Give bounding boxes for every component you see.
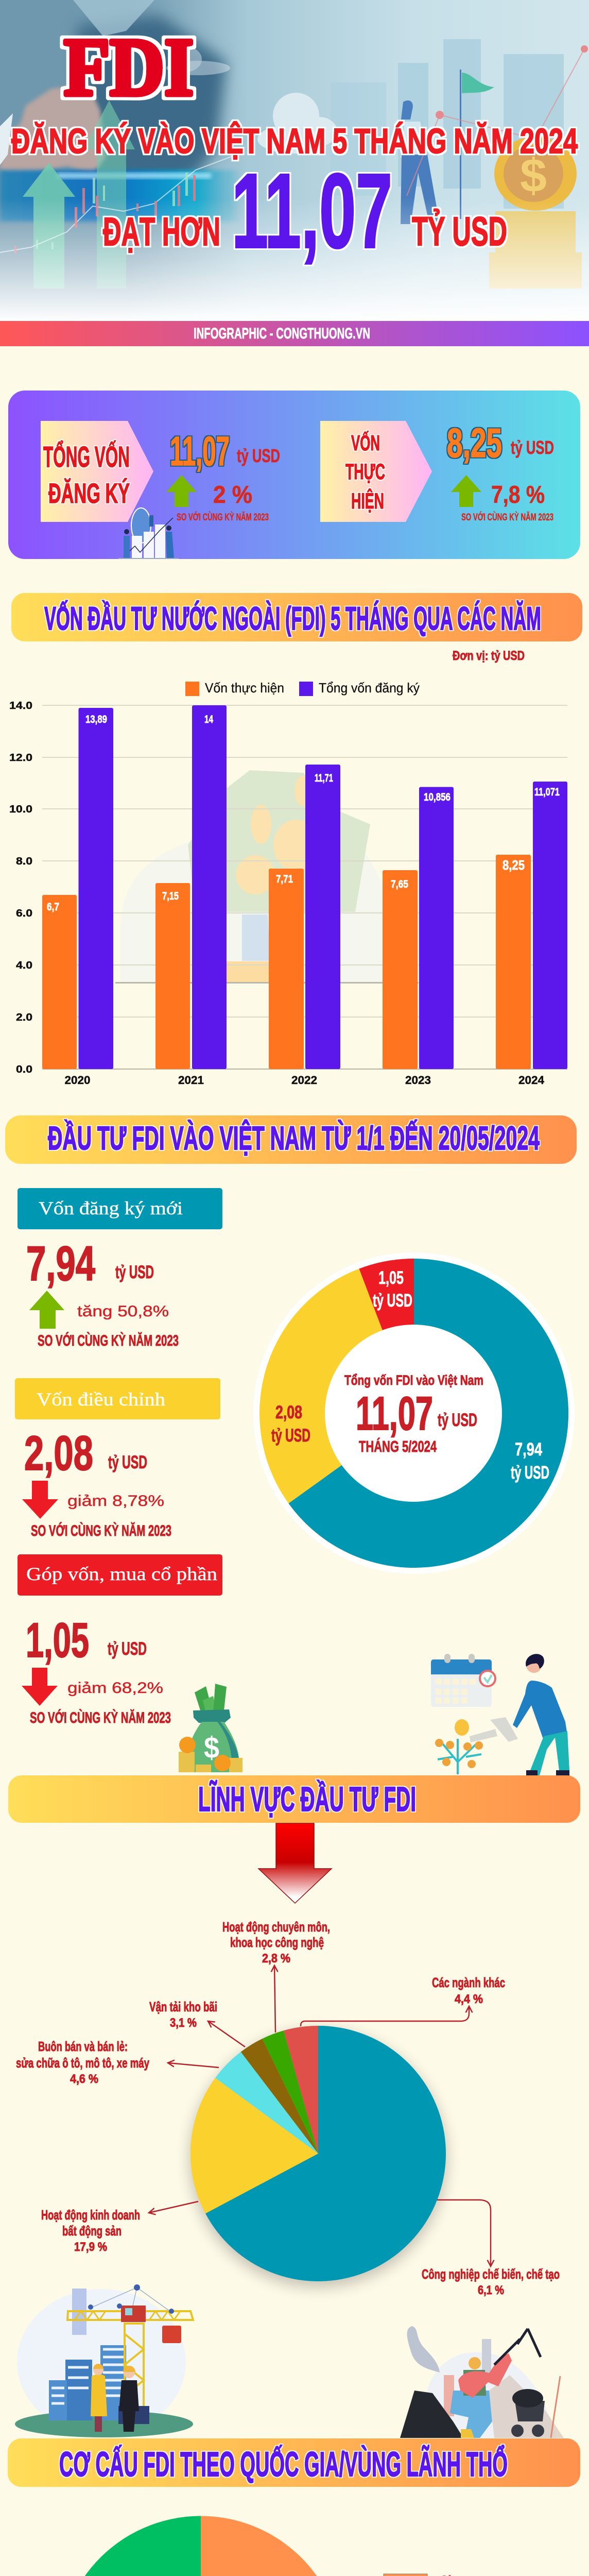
donut labels: tỷ USD [511, 1463, 549, 1483]
headline figure [103, 152, 507, 270]
block: new registered capital: Vốn đăng ký mới [39, 1198, 183, 1218]
person with flag [401, 100, 413, 120]
pie chart: countries [59, 2516, 343, 2576]
block: adjusted capital: tỷ USD [108, 1452, 147, 1472]
donut labels: tỷ USD [271, 1426, 310, 1446]
segment: other [284, 2026, 318, 2154]
segment: new capital [288, 1259, 568, 1568]
tag: total registered capital: ĐĂNG KÝ [48, 478, 130, 509]
bars: 2024: 2024 [518, 1074, 545, 1087]
icon: money bag [179, 1684, 242, 1772]
block: adjusted capital: 2,08 [24, 1426, 93, 1481]
block: new registered capital: tỷ USD [115, 1262, 154, 1282]
y axis labels: 10.0 [9, 804, 32, 815]
banner: investment sectors [8, 1775, 580, 1823]
segment: adjusted capital [259, 1269, 414, 1503]
block: capital contribution: tỷ USD [108, 1639, 147, 1659]
segment: real estate [190, 2078, 318, 2213]
bars: 2021 [155, 705, 227, 1087]
block: adjusted capital: Vốn điều chỉnh [37, 1389, 165, 1410]
donut labels: 2,08 [275, 1402, 302, 1422]
unit note: Đơn vị: tỷ USD [453, 649, 525, 663]
tag: implemented capital: VỐN [351, 430, 380, 455]
callouts: sector labels [16, 1919, 560, 2297]
plant [438, 1739, 481, 1774]
banner: investment sectors: LĨNH VỰC ĐẦU TƯ FDI [198, 1780, 416, 1819]
bars: 2021: 14 [204, 714, 213, 725]
hand [0, 85, 106, 180]
FDI heading: FDI [64, 21, 194, 113]
hero: illustrated header [0, 0, 589, 346]
segment: Singapore [201, 2516, 343, 2576]
block: new registered capital: SO VỚI CÙNG KỲ NĂM 2023 [38, 1332, 179, 1349]
block: capital contribution [18, 1554, 222, 1726]
block: capital contribution: SO VỚI CÙNG KỲ NĂM 2023 [30, 1709, 171, 1726]
chart background money illustration [115, 770, 419, 984]
segment: professional activities [262, 2030, 318, 2154]
label: other sectors: 4,4 % [455, 1992, 483, 2006]
label: other sectors: Các ngành khác [432, 1975, 505, 1990]
label: professional activities: 2,8 % [262, 1952, 290, 1965]
donut centre text: tỷ USD [438, 1410, 477, 1430]
label: real estate: bất động sản [62, 2223, 122, 2239]
label: professional activities [222, 1919, 330, 1965]
arrow: down to pie [258, 1823, 332, 1903]
label: transport: 3,1 % [170, 2016, 197, 2030]
bars: 2022 [269, 765, 340, 1087]
label: real estate: Hoạt động kinh doanh [41, 2207, 140, 2223]
bars: 2022: 7,71 [276, 873, 293, 885]
headline figure: TỶ USD [412, 208, 507, 254]
candle chart [0, 155, 237, 252]
donut centre text: Tổng vốn FDI vào Việt Nam [344, 1372, 483, 1388]
bars: 2020: 6,7 [47, 901, 59, 913]
donut centre text [344, 1372, 483, 1455]
donut labels [271, 1268, 549, 1483]
block: adjusted capital [15, 1378, 220, 1539]
figure: 11,07 [166, 428, 280, 523]
legend [185, 680, 420, 696]
gold coin and stack [489, 137, 582, 289]
label: manufacturing [422, 2266, 560, 2297]
donut centre text: THÁNG 5/2024 [359, 1437, 437, 1455]
label: transport [149, 1999, 217, 2030]
icon: miner scene [400, 2326, 564, 2438]
segment: contribution [359, 1259, 414, 1413]
green arrows [23, 163, 75, 289]
icon: money bag: $ [204, 1731, 219, 1765]
donut labels: 7,94 [515, 1439, 542, 1460]
y axis labels [9, 700, 32, 1075]
icon: construction scene [15, 2284, 193, 2437]
tag: implemented capital [320, 421, 432, 522]
tag: total registered capital [41, 421, 153, 522]
grid lines [42, 705, 567, 1017]
hero background image [0, 0, 589, 322]
label: other sectors [432, 1975, 505, 2006]
bars: 2020: 2020 [65, 1074, 91, 1087]
figure: 8,25 [447, 420, 554, 523]
label: manufacturing: 6,1 % [478, 2283, 504, 2297]
donut chart [253, 1252, 575, 1574]
label: wholesale and retail: 4,6 % [70, 2072, 98, 2086]
bars: 2023 [383, 787, 454, 1087]
y axis labels: 2.0 [16, 1012, 32, 1023]
tag: total registered capital: TỔNG VỐN [43, 440, 130, 473]
label: professional activities: khoa học công nghệ [230, 1935, 324, 1950]
y axis labels: 0.0 [16, 1064, 32, 1075]
figure: 11,07: tỷ USD [237, 445, 280, 466]
legend: countries [384, 2573, 576, 2576]
legend: Vốn thực hiện [205, 680, 284, 696]
figure: 11,07: 2 % [213, 481, 252, 508]
label: real estate [41, 2207, 140, 2254]
y axis labels: 12.0 [9, 752, 32, 764]
y axis labels: 6.0 [16, 908, 32, 919]
block: capital contribution: giảm 68,2% [67, 1680, 163, 1697]
block: new registered capital [18, 1188, 222, 1349]
y axis labels: 8.0 [16, 856, 32, 867]
segment: wholesale and retail [215, 2052, 318, 2154]
headline figure: 11,07 [232, 152, 392, 270]
label: wholesale and retail [16, 2039, 149, 2086]
top bar [0, 321, 589, 346]
segment: transport [241, 2039, 318, 2154]
glow band [0, 170, 242, 222]
bars: 2024 [496, 782, 567, 1087]
block: new registered capital: tăng 50,8% [77, 1303, 169, 1320]
y axis labels: 4.0 [16, 960, 32, 971]
figure: 8,25: 7,8 % [491, 481, 545, 508]
block: new registered capital: 7,94 [26, 1236, 95, 1291]
segment: manufacturing [205, 2026, 446, 2281]
figure: 11,07: 11,07 [170, 428, 230, 474]
icon: calendar [431, 1654, 495, 1707]
label: professional activities: Hoạt động chuyên môn, [222, 1919, 330, 1935]
headline figure: ĐẠT HƠN [103, 210, 220, 254]
top bar: INFOGRAPHIC - CONGTHUONG.VN [194, 325, 370, 342]
y axis labels: 14.0 [9, 700, 32, 711]
label: transport: Vận tải kho bãi [149, 1999, 217, 2014]
legend: Tổng vốn đăng ký [319, 680, 420, 696]
donut labels: 1,05 [378, 1268, 404, 1288]
icon: person watering plant [435, 1654, 569, 1777]
label: wholesale and retail: Buôn bán và bán lẻ: [38, 2039, 128, 2054]
tag: implemented capital: HIỆN [351, 488, 384, 514]
bars: 2023: 7,65 [391, 878, 408, 890]
block: adjusted capital: giảm 8,78% [67, 1493, 164, 1510]
segment: other partners [59, 2516, 201, 2576]
bars: 2022: 2022 [291, 1074, 317, 1087]
pie chart: sectors [189, 2026, 447, 2287]
bars: 2024: 11,071 [534, 786, 560, 798]
banner: capital over the years [11, 593, 582, 641]
banner: FDI into Vietnam [5, 1115, 577, 1164]
bars: 2020: 13,89 [85, 714, 107, 725]
block: capital contribution: 1,05 [26, 1613, 89, 1668]
block: capital contribution: Góp vốn, mua cổ phần [26, 1564, 217, 1584]
bar chart [9, 680, 567, 1087]
icon: team with bar chart [118, 508, 179, 559]
bars: 2022: 11,71 [315, 772, 333, 784]
bars: 2020 [42, 708, 113, 1087]
tag: implemented capital: THỰC [345, 460, 385, 484]
bars: 2023: 10,856 [424, 791, 451, 803]
bars: 2023: 2023 [405, 1074, 431, 1087]
bars: 2024: 8,25 [503, 857, 525, 873]
bars: 2021: 7,15 [162, 890, 179, 902]
bottom fade [0, 198, 589, 322]
figure: 11,07: SO VỚI CÙNG KỲ NĂM 2023 [177, 512, 269, 523]
gold coin and stack: $ [520, 149, 547, 202]
block: adjusted capital: SO VỚI CÙNG KỲ NĂM 2023 [31, 1522, 171, 1539]
label: real estate: 17,9 % [74, 2240, 107, 2254]
donut labels: tỷ USD [373, 1291, 412, 1311]
figure: 8,25: tỷ USD [511, 437, 554, 458]
panel: summary [8, 391, 580, 559]
label: wholesale and retail: sửa chữa ô tô, mô tô, xe máy [16, 2055, 149, 2071]
bars: 2021: 2021 [178, 1074, 204, 1087]
figure: 8,25: 8,25 [447, 420, 502, 466]
donut centre text: 11,07 [356, 1387, 433, 1440]
